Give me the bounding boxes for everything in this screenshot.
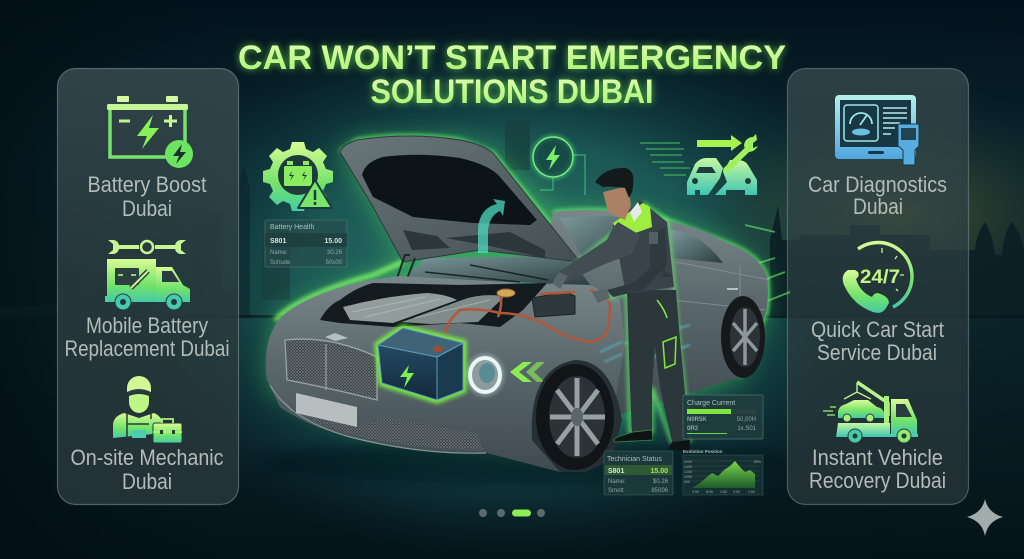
panel: Technician Status: S801 xyxy=(608,468,624,475)
text: Car Diagnostics Dubai xyxy=(808,172,947,219)
panel: Battery Health xyxy=(265,220,347,267)
front wheel xyxy=(532,360,622,472)
chart: Evolution Position: 500 xyxy=(684,480,690,484)
panel: Technician Status: 85006 xyxy=(651,488,669,494)
panel: Charge Current: N0R5K xyxy=(687,417,707,423)
chart: Evolution Position: 1:00 xyxy=(748,490,755,494)
text: Car Diagnostics Dubai: Car Diagnostics xyxy=(808,172,947,197)
panel: Battery Health: 15.00 xyxy=(324,238,342,245)
text: Battery Boost Dubai xyxy=(88,172,206,221)
text: Battery Boost Dubai: Dubai xyxy=(122,196,172,221)
icon: tow truck xyxy=(823,382,918,443)
text: Mobile Battery Replacement Dubai: Replacement Dubai xyxy=(64,336,230,361)
licence plate xyxy=(296,393,357,427)
front grille xyxy=(285,333,377,400)
panel: Technician Status: $0.26 xyxy=(653,479,669,485)
left panel: services xyxy=(58,68,238,504)
text: Quick Car Start Service Dubai xyxy=(811,317,944,365)
chart: Evolution Position: 1:00 xyxy=(720,490,727,494)
panel: Battery Health: Name: xyxy=(270,250,288,256)
panel: Charge Current: 50,00H xyxy=(737,417,756,423)
chart: Evolution Position: 8:00 xyxy=(706,490,713,494)
icon: charging bolt circuit xyxy=(533,137,585,195)
chart: Evolution Position: 2000 xyxy=(684,460,692,464)
cables xyxy=(445,289,610,342)
text: On-site Mechanic Dubai: Dubai xyxy=(122,469,172,494)
technician glow xyxy=(565,203,690,442)
text: Battery Boost Dubai: Battery Boost xyxy=(88,172,206,197)
chart: Evolution Position: 50% xyxy=(754,460,761,464)
ground shadow xyxy=(260,440,780,484)
panel: Battery Health: 30.26 xyxy=(327,250,343,256)
text: On-site Mechanic Dubai xyxy=(70,445,224,494)
title: SOLUTIONS DUBAI xyxy=(370,73,654,111)
panel: Technician Status: Smott xyxy=(608,488,624,494)
text: On-site Mechanic Dubai: On-site Mechanic xyxy=(70,445,224,470)
right panel: services xyxy=(788,68,968,504)
panel: Technician Status: 15.00 xyxy=(650,468,668,475)
title: SOLUTIONS DUBAI xyxy=(370,73,654,111)
panel: Battery Health: Battery Health xyxy=(270,224,314,231)
technician legs xyxy=(614,290,690,452)
panel: Charge Current xyxy=(683,395,763,439)
car roof and rear body xyxy=(530,210,770,417)
panel: Battery Health: 50s00 xyxy=(326,260,343,266)
panel: Charge Current: Charge Current xyxy=(687,400,735,407)
title: CAR WON’T START EMERGENCY xyxy=(238,39,786,77)
chart: Evolution Position: 1200 xyxy=(684,470,692,474)
text: Instant Vehicle Recovery Dubai: Recovery Dubai xyxy=(809,468,946,493)
icon: sparkle star xyxy=(967,499,1003,536)
car front body xyxy=(266,276,625,472)
text: Instant Vehicle Recovery Dubai xyxy=(809,445,946,493)
icon: battery boost xyxy=(107,96,193,168)
text: Car Diagnostics Dubai: Dubai xyxy=(853,194,903,219)
car glow halo xyxy=(267,136,790,450)
panel: Charge Current: 1x.S01 xyxy=(737,426,757,432)
panel: Technician Status: Technician Status xyxy=(607,456,662,463)
chart: Evolution Position: Evolution Position xyxy=(683,449,723,454)
text: Quick Car Start Service Dubai: Service Dubai xyxy=(817,340,937,365)
windscreen xyxy=(405,256,590,285)
headlight xyxy=(466,354,504,396)
background: Dubai skyline xyxy=(0,120,1024,318)
icon: mobile battery van xyxy=(105,240,190,310)
panel: Technician Status: Name: xyxy=(608,479,626,485)
chart: Evolution Position: 2:00 xyxy=(733,490,740,494)
text: Instant Vehicle Recovery Dubai: Instant Vehicle xyxy=(812,445,943,470)
technician xyxy=(552,168,690,452)
highlighted battery xyxy=(378,328,463,400)
technician head xyxy=(595,168,633,220)
panel: Battery Health: S801 xyxy=(270,238,286,245)
chart: Evolution Position: 1000 xyxy=(684,475,692,479)
pagination dots xyxy=(479,509,545,517)
chevrons xyxy=(510,362,545,382)
hood xyxy=(340,136,580,284)
technician gloves xyxy=(552,272,610,303)
panel: Battery Health: Schude xyxy=(270,260,291,266)
icon: battery gear warning xyxy=(263,142,333,211)
panel: Charge Current: 0R3 xyxy=(687,426,699,432)
text: Mobile Battery Replacement Dubai: Mobile Battery xyxy=(86,313,208,338)
icon: 24/7 phone clock xyxy=(843,242,912,313)
icon: car repair wrench xyxy=(640,134,758,195)
title: CAR WON’T START EMERGENCY xyxy=(238,39,786,77)
technician torso xyxy=(558,200,674,318)
title xyxy=(238,39,786,111)
text: Mobile Battery Replacement Dubai xyxy=(64,313,230,361)
lower grille xyxy=(270,385,486,453)
panel: Technician Status xyxy=(604,451,673,495)
upward arrow xyxy=(478,199,505,253)
text: Quick Car Start Service Dubai: Quick Car Start xyxy=(811,317,944,342)
chart: Evolution Position: 0:00 xyxy=(692,490,699,494)
icon: 24/7 phone clock: 24/7 xyxy=(860,267,900,288)
small battery xyxy=(532,292,575,317)
chart: Evolution Position: 1000 xyxy=(684,465,692,469)
icon: mechanic with toolbox xyxy=(113,376,182,443)
chart: Evolution Position xyxy=(683,449,763,495)
icon: car diagnostics monitor xyxy=(835,95,919,165)
illustration: car with raised hood xyxy=(260,136,790,484)
